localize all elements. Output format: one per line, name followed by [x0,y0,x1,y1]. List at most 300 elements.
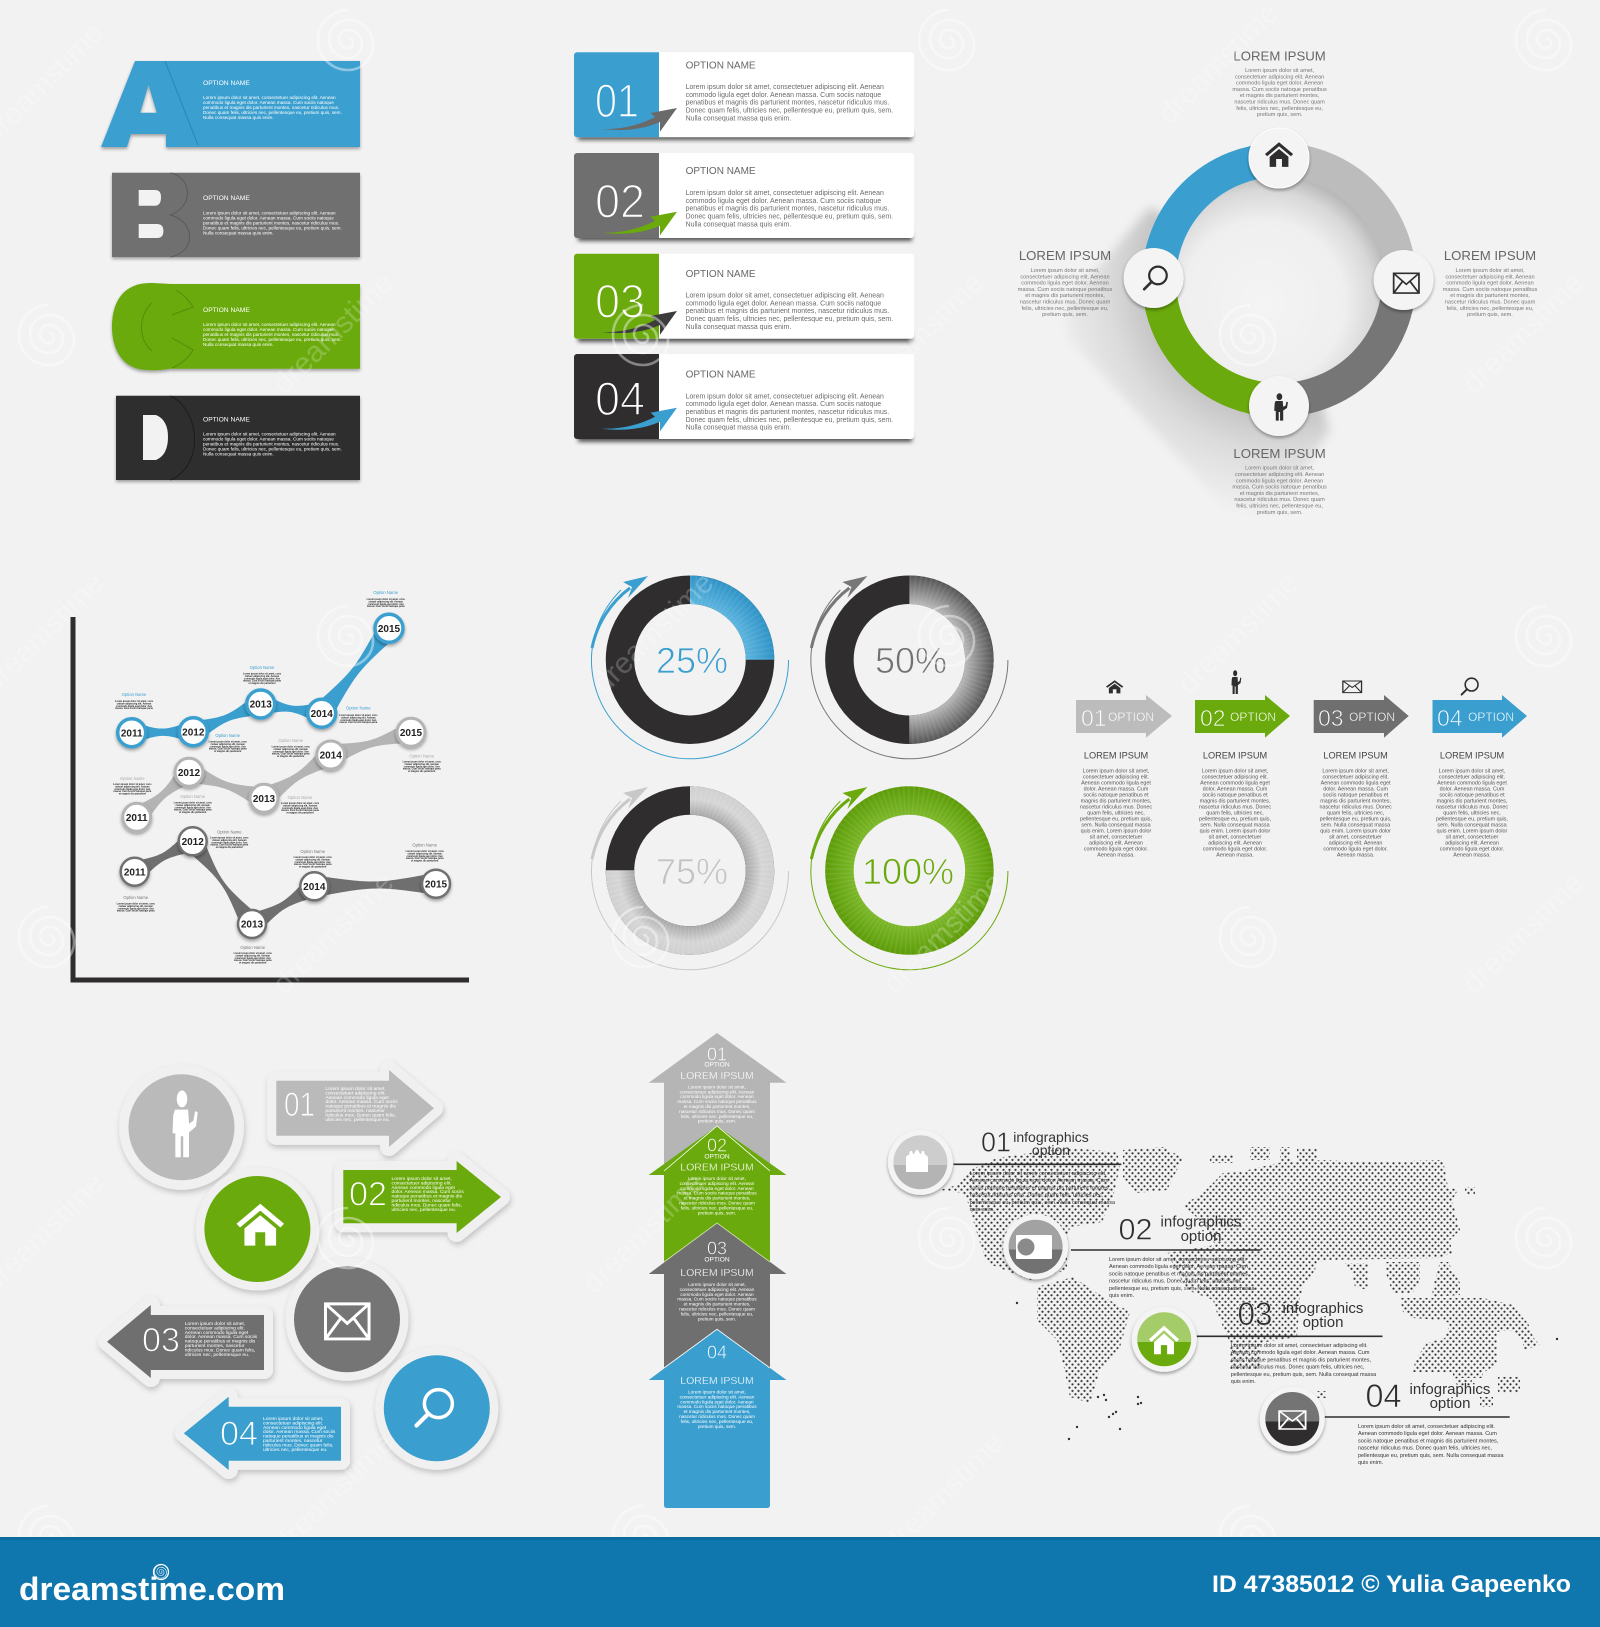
card D [116,396,360,480]
card C: Donec quam felis, ultricies nec, pellentesque eu, pretium quis, sem. [203,337,342,342]
text: left: consectetuer adipiscing elit. Aenean [1020,274,1110,280]
up arrow 03: et magnis dis parturient montes, [684,1302,750,1307]
card B: Lorem ipsum dolor sit amet, consectetuer adipiscing elit. Aenean [203,210,336,215]
text: top: commodo ligula eget dolor. Aenean [1236,81,1323,87]
timeline captions: massa. Cum sociis natoque pena [294,863,332,866]
card A [101,61,360,147]
text: bottom: LOREM IPSUM [1233,446,1326,461]
text: top: nascetur ridiculus mus. Donec quam [1234,100,1325,106]
step 01 [1076,680,1172,859]
map option 02: pellentesque eu, pretium quis, sem. Nulla consequat massa [1109,1286,1255,1292]
step 03: dolor. Aenean massa. Cum [1323,787,1388,793]
step 02: sem. Nulla consequat massa [1200,823,1270,829]
map option 02: sociis natoque penatibus et magnis dis parturient montes, [1109,1271,1250,1277]
text: left: massa. Cum sociis natoque penatibus [1018,287,1112,293]
timeline captions: Lorem ipsum dolor sit amet, cons [174,802,212,804]
map option 01: option [1032,1142,1070,1158]
timeline captions: Option Name [240,945,266,950]
panel: arrow steps row [1076,670,1527,859]
card 02: commodo ligula eget dolor. Aenean massa. Cum sociis natoque [686,198,881,205]
text: bottom: et magnis dis parturient montes, [1240,491,1320,497]
up arrow 02: et magnis dis parturient montes, [684,1196,750,1201]
timeline captions: Option Name [409,754,435,758]
timeline captions: massa. Cum sociis natoque pena [209,748,247,751]
circle: home [196,1168,319,1290]
step 04: sem. Nulla consequat massa [1437,823,1507,829]
timeline captions [113,590,444,965]
sticker arrow 04 [184,1397,341,1470]
card 01: OPTION NAME [686,60,756,72]
text: top: LOREM IPSUM [1233,48,1326,64]
circle: mail [286,1258,408,1381]
step 04: quis enim. Lorem ipsum dolor [1437,829,1508,835]
up arrow 01: consectetuer adipiscing elit. Aenean [680,1089,755,1094]
timeline captions: commodo ligula eget dolor. Aen [116,705,153,708]
map option 04: Aenean commodo ligula eget dolor. Aenean massa. Cum [1358,1431,1497,1437]
node: mail [1374,250,1434,310]
card B: Nulla consequat massa quis enim. [203,230,274,235]
timeline captions: Option Name [215,733,241,738]
card C: OPTION NAME [203,307,250,314]
timeline captions: massa. Cum sociis natoque pena [210,844,249,847]
timeline captions: Lorem ipsum dolor sit amet, cons [243,672,282,676]
card 01: Lorem ipsum dolor sit amet, consectetuer adipiscing elit. Aenean [686,84,884,91]
sticker arrow 03: natoque penatibus et magnis dis [185,1339,256,1345]
step 04: sociis natoque penatibus et [1439,793,1505,799]
text: left: pretium quis, sem. [1042,312,1088,318]
panel: percentage donuts [592,576,1008,970]
timeline captions: Lorem ipsum dolor sit amet, cons [294,856,332,859]
text: top [1232,48,1327,118]
map option 04: pellentesque eu, pretium quis, sem. Nulla consequat massa [1358,1453,1504,1459]
timeline captions: commodo ligula eget dolor. Aen [235,957,271,960]
sticker arrow 02: 02 [349,1176,387,1214]
card 01: 01 [595,74,639,127]
map option 03: 03 [1238,1296,1272,1332]
sticker arrow 01: 01 [284,1086,315,1124]
step 03: pellentesque eu, pretium quis, [1320,817,1392,823]
footer banner [0,1537,1600,1627]
step 04: OPTION [1468,710,1514,724]
up arrow 04: massa. Cum sociis natoque penatibus [677,1404,757,1409]
up arrow 01: et magnis dis parturient montes, [684,1104,750,1109]
map option 03: sociis natoque penatibus et magnis dis parturient montes, [1231,1357,1372,1363]
timeline captions: Option Name [300,849,326,854]
sticker arrow 04: parturient montes, nascetur [263,1438,323,1444]
map option 04: option [1430,1395,1470,1412]
watermark text: dreamstime [266,866,400,1000]
sticker arrow 03: dolor. Aenean massa. Cum sociis [185,1334,258,1340]
timeline captions: massa. Cum sociis natoque pena [115,707,154,710]
timeline captions: Lorem ipsum dolor sit amet, cons [115,700,154,703]
timeline captions: Option Name [180,794,206,799]
timeline captions: ctetuer adipiscing elit. Aenean [404,763,439,766]
text: right: commodo ligula eget dolor. Aenean [1446,281,1534,287]
step 04: LOREM IPSUM [1440,750,1504,760]
up arrow 03: consectetuer adipiscing elit. Aenean [680,1287,755,1292]
timeline captions: commodo ligula eget dolor. Aen [244,677,281,680]
timeline captions: Option Name [217,830,242,834]
card 04: commodo ligula eget dolor. Aenean massa. Cum sociis natoque [686,401,881,408]
sticker arrow 04: Aenean commodo ligula eget [263,1425,327,1431]
step 01: commodo ligula eget dolor. [1084,847,1148,853]
timeline captions: Option Name [120,776,145,781]
step 03: magnis dis parturient montes, [1320,799,1391,805]
text: top: et magnis dis parturient montes, [1240,93,1320,99]
blue series: 2015 [378,624,401,635]
step 03: Aenean massa. [1337,853,1374,859]
step 02: commodo ligula eget dolor. [1203,847,1267,853]
text: top: consectetuer adipiscing elit. Aenean [1235,74,1324,80]
map option 02: option [1181,1228,1221,1245]
map option 04: nascetur ridiculus mus. Donec quam felis, ultricies nec, [1358,1446,1492,1452]
map option 04: quis enim. [1358,1460,1384,1466]
step 04: quam felis, ultricies nec, [1443,811,1501,817]
card 03: 03 [595,274,645,328]
step 01: magnis dis parturient montes, [1081,799,1152,805]
text: right: felis, ultricies nec, pellentesque eu, [1447,306,1534,312]
step 02: 02 [1200,705,1226,731]
map option 01: Aenean commodo ligula eget dolor. Aenean massa. Cum [970,1178,1109,1184]
timeline captions: ctetuer adipiscing elit. Aenean [118,905,153,908]
card 01 [574,52,914,140]
up arrow 01: pretium quis, sem. [698,1119,736,1124]
card C: penatibus et magnis dis parturient montes, nascetur ridiculus mus. [203,332,339,337]
map option 02: nascetur ridiculus mus. Donec quam felis, ultricies nec, [1109,1279,1243,1285]
timeline captions: ctetuer adipiscing elit. Aenean [115,785,150,788]
watermark text: dreamstime [1151,0,1285,130]
sticker arrow 02: dolor. Aenean massa. Cum sociis [392,1189,464,1195]
step 02: adipiscing elit. Aenean [1208,841,1262,847]
timeline captions: commodo ligula eget dolor. Aen [340,719,377,722]
card D: OPTION NAME [203,416,250,424]
watermark text: dreamstime [1171,1166,1305,1300]
up arrow 02: LOREM IPSUM [680,1162,754,1174]
sticker arrow 04: Lorem ipsum dolor sit amet, [263,1416,323,1422]
card 04: Nulla consequat massa quis enim. [686,425,791,432]
card C [112,283,360,370]
map option 04: infographics [1410,1381,1490,1398]
up arrow 03 [649,1223,786,1375]
step 02: quam felis, ultricies nec, [1206,811,1264,817]
timeline captions: et magnis dis parturient [119,793,146,796]
panel: numbered option cards [574,52,914,442]
up arrow 01: massa. Cum sociis natoque penatibus [677,1099,757,1104]
step 04: 04 [1437,705,1463,731]
blue series [118,614,403,747]
up arrow 02: OPTION [704,1153,730,1160]
step 03: sociis natoque penatibus et [1323,793,1389,799]
up arrow 02: Lorem ipsum dolor sit amet, [688,1176,746,1181]
light grey series: 2014 [320,751,342,762]
timeline captions: Lorem ipsum dolor sit amet, cons [117,902,155,906]
timeline captions: et magnis dis parturient [411,860,438,863]
blue series: 2012 [182,727,205,738]
timeline captions: Lorem ipsum dolor sit amet, cons [210,836,249,840]
map option 01 [888,1127,1121,1213]
step 01: sit amet, consectetuer [1090,835,1143,841]
card C: Lorem ipsum dolor sit amet, consectetuer adipiscing elit. Aenean [203,322,336,327]
card B [112,173,360,257]
map option 04: sociis natoque penatibus et magnis dis parturient montes, [1358,1438,1499,1444]
text: left [1018,248,1112,318]
node: search [1124,248,1184,308]
text: bottom: consectetuer adipiscing elit. Aenean [1235,472,1324,478]
donut 25%: 25% [656,640,728,681]
dark grey series: 2015 [425,879,448,890]
card 02: Nulla consequat massa quis enim. [686,221,791,228]
card A: commodo ligula eget dolor. Aenean massa. Cum sociis natoque [203,100,334,105]
long shadow [1068,207,1330,513]
map option 01: quis enim. [970,1207,995,1213]
timeline captions: Lorem ipsum dolor sit amet, cons [403,760,441,764]
map option 01: infographics [1013,1129,1089,1145]
sticker arrow 02: consectetuer adipiscing elit. [392,1180,452,1186]
timeline captions: massa. Cum sociis natoque pena [406,857,444,860]
step 03: quis enim. Lorem ipsum dolor [1320,829,1391,835]
watermark text: dreamstime [1171,566,1305,700]
timeline captions: Lorem ipsum dolor sit amet, cons [209,740,247,744]
sticker arrow 02: ridiculus mus. Donec quam felis, [392,1202,462,1208]
step 04: pellentesque eu, pretium quis, [1436,817,1508,823]
sticker arrow 01: Aenean commodo ligula eget [325,1095,389,1101]
text: left: felis, ultricies nec, pellentesque eu, [1022,306,1109,312]
up arrow 02: consectetuer adipiscing elit. Aenean [680,1181,755,1186]
sticker arrow 03: ultricies nec, pellentesque eu. [185,1352,249,1358]
donut 25% [592,576,789,759]
map option 03 [1132,1296,1382,1385]
timeline captions: Lorem ipsum dolor sit amet, cons [272,746,310,748]
step 02: Aenean massa. [1216,853,1254,859]
ring segment green [1159,280,1279,400]
step 01: LOREM IPSUM [1084,750,1148,760]
card A: Nulla consequat massa quis enim. [203,115,274,120]
card 04: Lorem ipsum dolor sit amet, consectetuer adipiscing elit. Aenean [686,393,884,400]
card 04: OPTION NAME [686,370,756,380]
up arrow 04 [649,1329,786,1508]
sticker arrow 01 [276,1070,434,1147]
card A: penatibus et magnis dis parturient montes, nascetur ridiculus mus. [203,105,339,110]
up arrow 02: felis, ultricies nec, pellentesque eu, [681,1205,753,1210]
timeline captions: commodo ligula eget dolor. Aen [114,788,151,791]
sticker arrow 02: ultricies nec, pellentesque eu. [392,1207,456,1213]
up arrow 01: LOREM IPSUM [680,1070,754,1082]
timeline captions: ctetuer adipiscing elit. Aenean [407,852,442,855]
timeline captions: Lorem ipsum dolor sit amet, cons [406,850,444,853]
panel: circular ring diagram [1018,48,1537,516]
text: right: Lorem ipsum dolor sit amet, [1455,268,1525,274]
step 03: nascetur ridiculus mus. Donec [1319,805,1392,811]
timeline captions: Option Name [250,665,275,670]
card D: commodo ligula eget dolor. Aenean massa. Cum sociis natoque [203,436,334,441]
card 02: Lorem ipsum dolor sit amet, consectetuer adipiscing elit. Aenean [686,190,884,197]
up arrow 03: felis, ultricies nec, pellentesque eu, [681,1311,753,1316]
card 02: Donec quam felis, ultricies nec, pellentesque eu, pretium quis, sem. [686,214,893,221]
up arrow 01: felis, ultricies nec, pellentesque eu, [681,1114,753,1119]
sticker arrow 04: natoque penatibus et magnis dis [263,1434,334,1440]
light grey series: 2013 [253,794,276,805]
card 03: commodo ligula eget dolor. Aenean massa. Cum sociis natoque [686,300,881,307]
donut 75% [592,787,789,970]
card 04: 04 [595,372,645,425]
up arrow 01: OPTION [704,1062,730,1069]
text: right: consectetuer adipiscing elit. Aenean [1445,274,1535,280]
timeline captions: ctetuer adipiscing elit. Aenean [212,839,247,842]
up arrow 03: 03 [707,1239,727,1259]
up arrow 04: consectetuer adipiscing elit. Aenean [680,1394,755,1399]
watermark text: dreamstime [266,1426,400,1560]
step 04: Aenean massa. [1453,853,1491,859]
up arrow 03: nascetur ridiculus mus. Donec quam [679,1306,755,1312]
timeline captions: massa. Cum sociis natoque pena [113,790,152,793]
donut 75%: 75% [656,851,728,892]
card 03: penatibus et magnis dis parturient montes, nascetur ridiculus mus. [686,308,889,315]
card 01: commodo ligula eget dolor. Aenean massa. Cum sociis natoque [686,92,881,99]
text: bottom: Lorem ipsum dolor sit amet, [1245,466,1315,472]
timeline captions: ctetuer adipiscing elit. Aenean [341,716,376,719]
timeline captions: Option Name [288,795,313,800]
timeline captions: Lorem ipsum dolor sit amet, cons [281,802,320,805]
circle: search [375,1347,498,1470]
sticker arrow 01: consectetuer adipiscing elit. [325,1090,385,1096]
card 04 [574,354,914,442]
timeline captions: massa. Cum sociis natoque pena [272,753,310,756]
text: bottom: commodo ligula eget dolor. Aenean [1236,478,1323,484]
watermark text: dreamstime [586,566,720,700]
timeline captions: et magnis dis parturient [277,755,304,758]
card B: OPTION NAME [203,195,250,202]
up arrow 04: et magnis dis parturient montes, [684,1409,750,1414]
card B: commodo ligula eget dolor. Aenean massa. Cum sociis natoque [203,215,334,220]
ring interior [1174,175,1386,387]
timeline captions: massa. Cum sociis natoque pena [174,809,212,812]
donut 100% [811,787,1008,970]
map option 01: nascetur ridiculus mus. Donec quam felis, ultricies nec, [970,1193,1104,1199]
timeline captions: massa. Cum sociis natoque pena [403,768,441,771]
ring segment blue [1159,160,1279,280]
map option 01: sociis natoque penatibus et magnis dis parturient montes, [970,1185,1110,1191]
map option 02: Lorem ipsum dolor sit amet, consectetuer adipiscing elit. [1109,1257,1246,1263]
sticker arrow 04: ridiculus mus. Donec quam felis, [263,1442,333,1448]
step 01: pellentesque eu, pretium quis, [1080,817,1152,823]
up arrow 02: 02 [707,1136,727,1156]
step 01: 01 [1081,705,1107,731]
text: left: nascetur ridiculus mus. Donec quam [1020,300,1111,306]
step 04: adipiscing elit. Aenean [1445,841,1499,847]
step 01: OPTION [1108,710,1154,724]
timeline captions: Option Name [278,738,304,743]
sticker arrow 01: dolor. Aenean massa. Cum sociis [325,1099,398,1105]
timeline captions: ctetuer adipiscing elit. Aenean [117,702,152,705]
sticker arrow 03: ridiculus mus. Donec quam felis, [185,1347,255,1353]
timeline captions: et magnis dis parturient [239,962,266,965]
step 03: commodo ligula eget dolor. [1323,847,1388,853]
map option 03: infographics [1283,1300,1363,1317]
card 03 [574,254,914,342]
blue series: 2014 [311,709,333,720]
sticker arrow 02: parturient montes, nascetur [392,1198,451,1204]
step 01: sociis natoque penatibus et [1083,793,1149,799]
timeline captions: ctetuer adipiscing elit. Aenean [175,804,210,807]
panel: timeline chart [73,590,469,980]
sticker arrow 01: ridiculus mus. Donec quam felis, [325,1112,396,1118]
card 04: penatibus et magnis dis parturient montes, nascetur ridiculus mus. [686,409,889,416]
sticker arrow 01: Lorem ipsum dolor sit amet, [325,1086,386,1092]
card D: Lorem ipsum dolor sit amet, consectetuer adipiscing elit. Aenean [203,431,336,436]
text: bottom [1232,446,1327,516]
ring segment dark grey [1279,280,1399,400]
up arrow 02: massa. Cum sociis natoque penatibus [677,1191,757,1196]
light grey series: 2011 [126,813,148,824]
step 02: sociis natoque penatibus et [1202,793,1268,799]
sticker arrow 04: ultricies nec, pellentesque eu. [263,1447,327,1453]
up arrow 02: pretium quis, sem. [698,1210,736,1215]
map option 04: 04 [1366,1378,1402,1414]
logo text: dreamstime.com [19,1571,285,1607]
chart axes [73,617,469,980]
watermark text: dreamstime [1456,266,1590,400]
card D: penatibus et magnis dis parturient montes, nascetur ridiculus mus. [203,441,339,446]
light grey series: 2012 [178,768,201,779]
card A: Donec quam felis, ultricies nec, pellentesque eu, pretium quis, sem. [203,110,342,115]
text: bottom: massa. Cum sociis natoque penatibus [1232,485,1327,491]
step 02: OPTION [1230,710,1276,724]
card 02: OPTION NAME [686,166,756,177]
text: right: nascetur ridiculus mus. Donec quam [1445,300,1536,306]
timeline captions: ctetuer adipiscing elit. Aenean [235,954,270,957]
donut 50% [811,576,1008,759]
step 01: adipiscing elit. Aenean [1089,841,1143,847]
up arrow 03: pretium quis, sem. [698,1316,736,1321]
timeline captions: ctetuer adipiscing elit. Aenean [273,748,308,751]
step 01: quis enim. Lorem ipsum dolor [1081,829,1152,835]
timeline captions: et magnis dis parturient [408,770,435,773]
timeline captions: Option Name [123,895,149,900]
light grey series [123,718,425,831]
step 01: quam felis, ultricies nec, [1087,811,1145,817]
map option 03: option [1303,1314,1343,1331]
up arrow 01: 01 [707,1044,727,1064]
card 03: Nulla consequat massa quis enim. [686,324,791,331]
up arrow 03: OPTION [704,1256,730,1263]
text: right: pretium quis, sem. [1467,312,1513,318]
dark grey series: 2012 [182,837,204,848]
blue series: 2011 [121,728,143,739]
step 03: sit amet, consectetuer [1329,835,1382,841]
up arrow 04: nascetur ridiculus mus. Donec quam [679,1414,755,1419]
map option 02: 02 [1118,1213,1152,1246]
timeline captions: massa. Cum sociis natoque pena [339,721,378,724]
up arrow 01: commodo ligula eget dolor. Aenean [680,1094,754,1099]
map option 03: pellentesque eu, pretium quis, sem. Nulla consequat massa [1231,1372,1377,1378]
node: person [1249,376,1309,436]
card 03: Lorem ipsum dolor sit amet, consectetuer adipiscing elit. Aenean [686,292,884,300]
step 02: magnis dis parturient montes, [1200,799,1271,805]
timeline captions: Option Name [373,590,399,595]
step 04: commodo ligula eget dolor. [1440,847,1504,853]
timeline captions: Option Name [346,706,371,710]
step 03: Aenean commodo ligula eget [1321,781,1391,787]
step 04: magnis dis parturient montes, [1437,799,1508,805]
timeline captions: et magnis dis parturient [299,866,326,869]
card 01: Nulla consequat massa quis enim. [686,115,791,122]
up arrow 01 [649,1033,786,1172]
step 03 [1314,681,1409,859]
card 02: penatibus et magnis dis parturient montes, nascetur ridiculus mus. [686,206,889,213]
ring segment light grey [1279,160,1399,280]
sticker arrow 01: parturient montes, nascetur [325,1108,385,1114]
card A: Lorem ipsum dolor sit amet, consectetuer adipiscing elit. Aenean [203,95,336,100]
